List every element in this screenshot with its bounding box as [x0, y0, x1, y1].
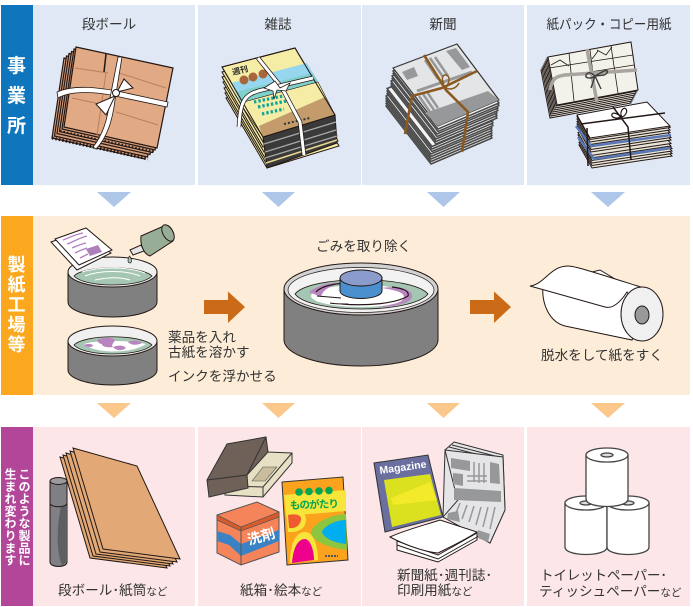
icon: waste paper sheets	[51, 228, 112, 270]
heading: 紙パック・コピー用紙: 紙パック・コピー用紙	[546, 17, 672, 32]
icon: paper tube	[50, 478, 67, 566]
sidebar: 製紙工場等: 場	[8, 315, 26, 335]
panel: 紙箱・絵本	[198, 427, 361, 606]
label: トイレットペーパー・ティッシュペーパーなど: ティッシュペーパーなど	[539, 584, 681, 599]
sidebar: 製紙工場等: 工	[8, 295, 26, 315]
panel: 製紙工場	[33, 216, 690, 395]
text: 洗剤: 洗剤	[245, 525, 277, 548]
label: 段ボール・紙筒など: 段ボール･紙筒など	[58, 582, 168, 598]
text: 脱水をして紙をすく: 脱水をして紙をすく	[541, 348, 663, 363]
sidebar: 事業所	[1, 5, 33, 185]
sidebar: このような製品に生まれ変わります	[1, 427, 33, 606]
icon: paper box	[207, 437, 292, 497]
icon: cleaning tank	[284, 263, 438, 366]
panel: 紙パック・コピー用紙	[527, 5, 690, 185]
icon: open newspaper	[443, 442, 505, 543]
icon: detergent box	[217, 502, 279, 565]
arrow: step 2 to step 3	[470, 292, 511, 323]
panel: 段ボール	[33, 5, 195, 185]
text: 薬品を入れ 古紙を溶かす: 古紙を溶かす	[168, 345, 250, 360]
sidebar: 製紙工場等	[1, 216, 33, 395]
icon: stacked rolls	[565, 448, 649, 554]
sidebar: 製紙工場等: 製	[8, 255, 26, 275]
label: 新聞紙・週刊誌・印刷用紙など: 印刷用紙など	[397, 583, 472, 598]
週刊 cover label: 週刊	[231, 63, 249, 77]
panel: トイレットペーパー	[527, 427, 690, 606]
icon: central cylinder	[340, 270, 382, 299]
label: トイレットペーパー・ティッシュペーパーなど: トイレットペーパー･	[540, 568, 667, 583]
icon: cardboard bundle	[52, 47, 173, 159]
heading: 新聞: 新聞	[429, 17, 457, 32]
icon: picture book	[282, 477, 348, 565]
icon: chemical bottle	[128, 223, 177, 263]
panel: 段ボール・紙筒	[33, 427, 195, 606]
label: 紙箱・絵本など: 紙箱･絵本など	[240, 583, 323, 598]
text: ごみを取り除く: ごみを取り除く	[316, 239, 411, 254]
icon: magazine	[374, 455, 443, 532]
text: インクを浮かせる: インクを浮かせる	[168, 369, 277, 384]
sidebar: 事業所: 所	[7, 115, 26, 137]
text: Magazine: Magazine	[379, 458, 427, 477]
arrows: 事業所 to 製紙工場	[97, 192, 625, 207]
panel: 新聞	[362, 5, 524, 185]
arrows: 製紙工場 to products	[97, 403, 625, 418]
icon: newspaper bundle	[386, 44, 499, 164]
panel: 新聞紙・週刊誌・印刷用紙	[362, 427, 524, 606]
arrow: step 1 to step 2	[204, 292, 245, 323]
heading: 雑誌: 雑誌	[264, 17, 292, 32]
icon: printing paper stack	[390, 520, 477, 562]
label: 新聞紙・週刊誌・印刷用紙など: 新聞紙･週刊誌･	[397, 568, 492, 583]
sidebar: このような製品に生まれ変わります: 生まれ変わります	[3, 467, 17, 566]
icon: paper pack bundle	[541, 42, 672, 168]
sidebar: このような製品に生まれ変わります: このような製品に	[17, 468, 31, 566]
icon: ink floating tank	[68, 326, 157, 385]
icon: dissolving tank	[51, 223, 177, 317]
sidebar: 製紙工場等: 等	[8, 334, 26, 355]
icon: magazine bundle	[222, 48, 339, 168]
panel: 雑誌	[198, 5, 361, 185]
text: 薬品を入れ 古紙を溶かす: 薬品を入れ	[168, 330, 236, 345]
sidebar: 事業所: 事	[7, 55, 26, 77]
heading: 段ボール: 段ボール	[82, 17, 136, 32]
sidebar: 事業所: 業	[7, 85, 26, 107]
icon: cardboard sheets	[60, 448, 180, 568]
icon: paper roll	[530, 266, 663, 341]
text: ものがたり: ものがたり	[290, 497, 339, 512]
sidebar: 製紙工場等: 紙	[8, 275, 26, 295]
